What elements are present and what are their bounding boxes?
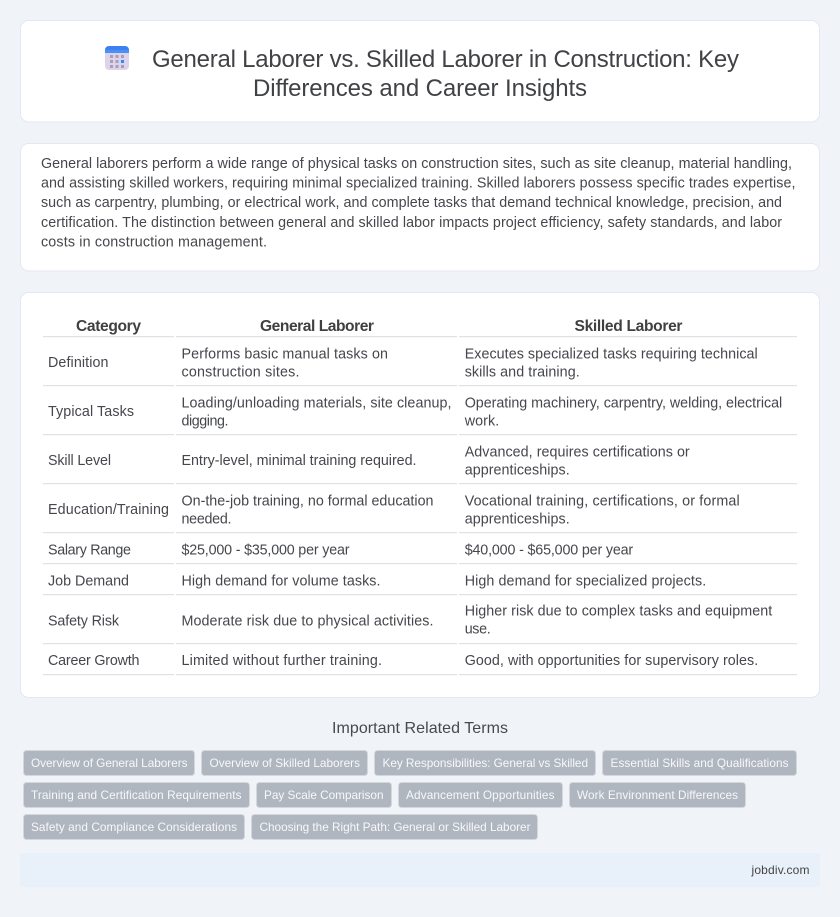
tag: Advancement Opportunities <box>406 788 555 802</box>
tag: Choosing the Right Path: General or Skilled Laborer <box>260 820 531 834</box>
row: skill level <box>43 444 797 484</box>
tag <box>602 750 796 776</box>
tag: Overview of Skilled Laborers <box>210 756 360 770</box>
row: typical tasks: digging. <box>182 414 228 430</box>
row: typical tasks: Typical Tasks <box>48 404 134 420</box>
row: skill level: Skill Level <box>48 453 111 469</box>
title <box>152 46 739 102</box>
row: job demand: Job Demand <box>48 573 129 589</box>
row: safety risk: use. <box>465 622 491 638</box>
title: General Laborer vs. Skilled Laborer in Construction: Key <box>152 46 739 73</box>
row: education and training: Education/Training <box>48 502 169 518</box>
row: skill level: Advanced, requires certifications or <box>465 444 690 460</box>
row: job demand: High demand for specialized projects. <box>465 573 706 589</box>
tag: Essential Skills and Qualifications <box>610 756 789 770</box>
row: definition: Executes specialized tasks requiring technical <box>465 346 758 362</box>
row: skill level: Entry-level, minimal training required. <box>182 453 416 469</box>
row: skill level: apprenticeships. <box>465 462 570 478</box>
row: typical tasks <box>43 396 797 435</box>
tag: Training and Certification Requirements <box>31 788 242 802</box>
row: education and training: On-the-job training, no formal education <box>182 494 434 510</box>
row: definition: Performs basic manual tasks on <box>182 346 388 362</box>
row: education and training: apprenticeships. <box>465 512 570 528</box>
tag <box>24 782 250 808</box>
row: safety risk: Safety Risk <box>48 613 120 629</box>
row: salary range: Salary Range <box>48 542 131 558</box>
related term tags <box>24 750 796 840</box>
row: salary range: $25,000 - $35,000 per year <box>182 542 350 558</box>
table header row: Category <box>76 318 141 335</box>
table header row: Skilled Laborer <box>574 318 682 335</box>
panel: comparison table <box>20 292 820 698</box>
tag: Overview of General Laborers <box>31 756 188 770</box>
row: salary range <box>43 542 797 564</box>
tag <box>252 814 538 840</box>
panel: introduction text: certification. The distinction between general and skilled labor impacts project efficiency, safety standards, and labor <box>41 215 782 231</box>
row: salary range: $40,000 - $65,000 per year <box>465 542 633 558</box>
tag: Key Responsibilities: General vs Skilled <box>382 756 588 770</box>
row: typical tasks: Loading/unloading materials, site cleanup, <box>182 396 452 412</box>
title: Differences and Career Insights <box>253 75 587 102</box>
row: job demand <box>43 573 797 595</box>
table header row: General Laborer <box>260 318 374 335</box>
panel: introduction text <box>20 144 820 271</box>
panel: introduction text: costs in construction management. <box>41 234 267 250</box>
row: education and training: Vocational training, certifications, or formal <box>465 494 740 510</box>
tag <box>256 782 392 808</box>
heading: important related terms: Important Related Terms <box>332 720 508 737</box>
tag <box>24 750 194 776</box>
row: definition <box>43 346 797 386</box>
row: education and training: needed. <box>182 512 232 528</box>
tag <box>398 782 562 808</box>
row: career growth: Career Growth <box>48 653 140 669</box>
row: career growth: Limited without further training. <box>182 653 382 669</box>
tag <box>570 782 746 808</box>
row: safety risk: Moderate risk due to physical activities. <box>182 613 434 629</box>
row: definition: construction sites. <box>182 364 300 380</box>
tag: Safety and Compliance Considerations <box>31 820 237 834</box>
tag: Work Environment Differences <box>577 788 738 802</box>
row: career growth: Good, with opportunities for supervisory roles. <box>465 653 758 669</box>
panel: introduction text: and assisting skilled workers, requiring minimal specialized training. Skilled laborers possess specific trades expertise, <box>41 176 796 192</box>
row: definition: Definition <box>48 355 109 371</box>
tag <box>202 750 368 776</box>
row: safety risk <box>43 604 797 644</box>
footer <box>20 853 820 887</box>
row: definition: skills and training. <box>465 364 580 380</box>
tag <box>24 814 244 840</box>
row: typical tasks: work. <box>464 414 499 430</box>
panel: introduction text: such as carpentry, plumbing, or electrical work, and complete tasks that demand technical knowledge, precision, and <box>41 195 782 211</box>
row: typical tasks: Operating machinery, carpentry, welding, electrical <box>465 396 782 412</box>
tag: Pay Scale Comparison <box>264 788 384 802</box>
panel: title header <box>20 20 820 122</box>
footer: jobdiv.com <box>750 863 810 877</box>
row: safety risk: Higher risk due to complex tasks and equipment <box>465 604 772 620</box>
tag <box>374 750 596 776</box>
row: career growth <box>43 653 797 675</box>
icon: calendar <box>105 46 129 70</box>
row: job demand: High demand for volume tasks. <box>182 573 380 589</box>
panel: introduction text: General laborers perform a wide range of physical tasks on construction sites, such as site cleanup, material handling, <box>41 156 792 172</box>
table header row <box>43 318 797 337</box>
row: education and training <box>43 494 797 533</box>
